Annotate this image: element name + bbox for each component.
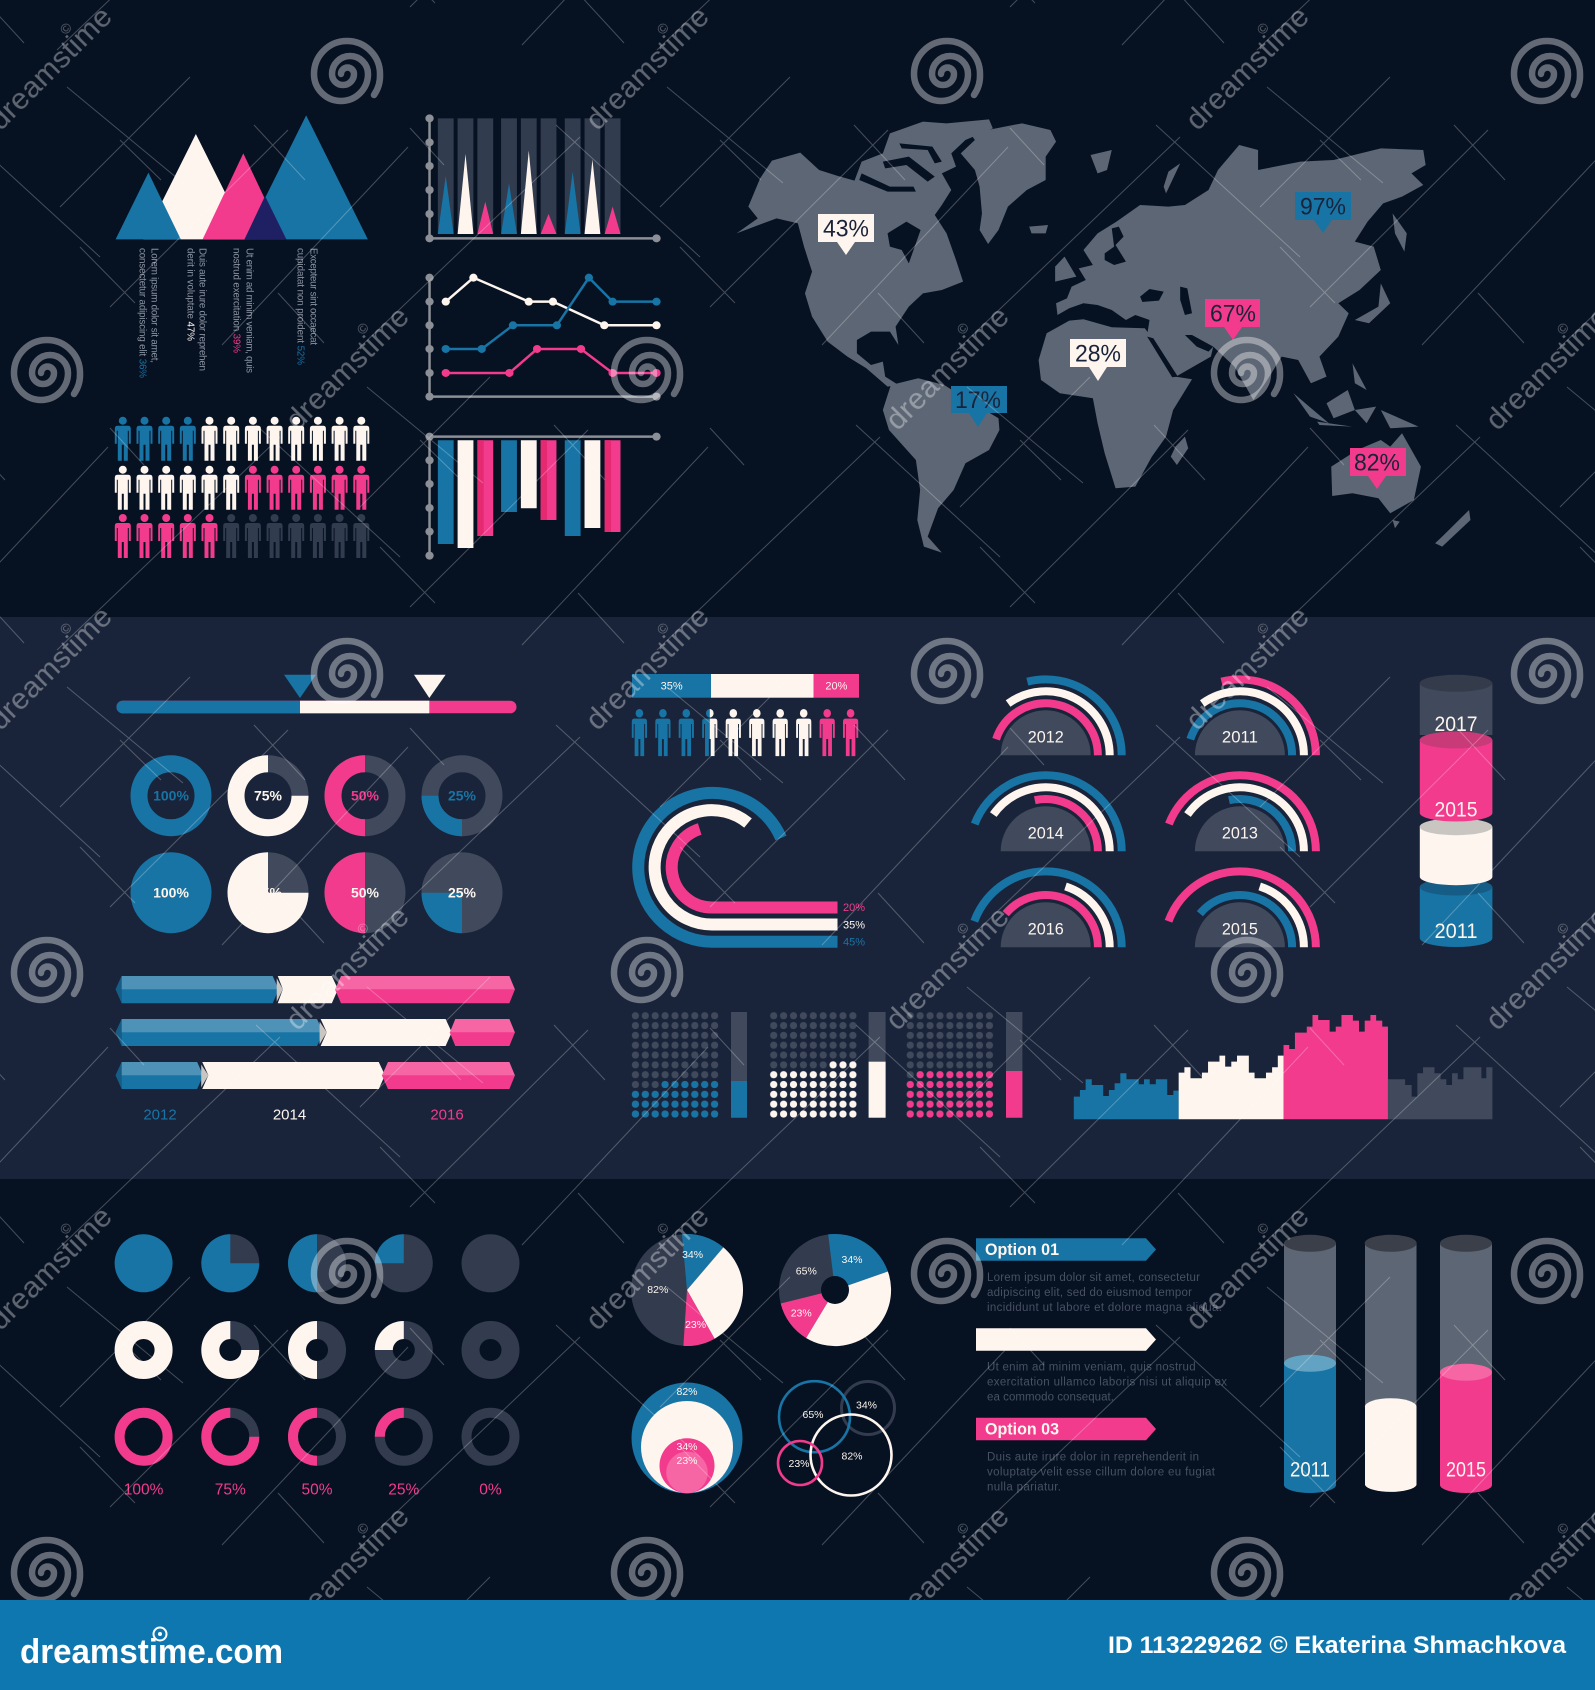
stacked percentage bar: 20% bbox=[825, 680, 848, 692]
watermark: dreamstime text: dreamstime bbox=[279, 300, 416, 437]
stacked cylinder: 2015 bbox=[1434, 799, 1478, 822]
progress pies row bbox=[130, 852, 502, 933]
3D bar year labels: 2016 bbox=[430, 1106, 464, 1124]
watermark: dreamstime text: © bbox=[1553, 319, 1572, 338]
watermark: dreamstime text: © bbox=[953, 919, 972, 938]
watermark: dreamstime text: dreamstime bbox=[1179, 600, 1316, 737]
percentage labels: 0% bbox=[479, 1482, 502, 1498]
vertical captions under mountains: Ut enim ad minim veniam, quis bbox=[244, 248, 254, 373]
stacked percentage bar bbox=[632, 674, 859, 698]
gauge: 2016: 2016 bbox=[1028, 919, 1064, 938]
dot grid gauge: blue bbox=[630, 1011, 747, 1119]
watermark: dreamstime text: © bbox=[353, 319, 372, 338]
watermark: dreamstime text: © bbox=[56, 1219, 75, 1238]
watermark: dreamstime text: © bbox=[1553, 919, 1572, 938]
watermark: dreamstime text: © bbox=[353, 1519, 372, 1538]
stacked cylinder: 2011 bbox=[1434, 920, 1478, 943]
nested circles bbox=[632, 1382, 742, 1494]
3D segmented bars bbox=[116, 976, 515, 1089]
watermark: dreamstime text: © bbox=[353, 919, 372, 938]
progress donuts row: 50% bbox=[351, 788, 380, 804]
option 01 bbox=[976, 1238, 1222, 1314]
tube gauge: 2013: 2013 bbox=[1371, 1459, 1411, 1482]
gauge: 2013 bbox=[1169, 775, 1316, 851]
gauge: 2012: 2012 bbox=[1028, 727, 1064, 746]
progress donuts row bbox=[139, 764, 494, 828]
map pin: 28%: 28% bbox=[1075, 340, 1121, 368]
watermark: dreamstime text: dreamstime bbox=[1179, 1200, 1316, 1337]
pie chart 2 with hole bbox=[779, 1234, 891, 1346]
dot grid gauge: pink bbox=[905, 1011, 1022, 1119]
watermark: dreamstime text: dreamstime bbox=[879, 300, 1016, 437]
hanging bar chart bbox=[425, 433, 661, 560]
line chart bbox=[425, 274, 661, 401]
watermark: dreamstime text: © bbox=[953, 319, 972, 338]
option 01: Option 01 bbox=[985, 1240, 1059, 1259]
panel: bottom background bbox=[0, 1179, 1595, 1600]
3D bar year labels: 2012 bbox=[143, 1106, 177, 1124]
option 02: exercitation ullamco laboris nisi ut aliquip ex bbox=[987, 1376, 1227, 1388]
watermark: dreamstime text: dreamstime bbox=[279, 900, 416, 1037]
people row under stacked bar bbox=[632, 709, 858, 756]
watermark: dreamstime text: © bbox=[953, 1519, 972, 1538]
option 03: Duis aute irure dolor in reprehenderit in bbox=[987, 1452, 1199, 1464]
progress donuts row: 25% bbox=[448, 788, 477, 804]
pie chart 2 with hole: 82% bbox=[841, 1312, 863, 1324]
watermark: dreamstime text: dreamstime bbox=[579, 1200, 716, 1337]
watermark: dreamstime text: dreamstime bbox=[579, 0, 716, 137]
overlapping outline circles: 82% bbox=[841, 1451, 863, 1463]
watermark: dreamstime text: © bbox=[56, 619, 75, 638]
percentage labels: 50% bbox=[301, 1482, 333, 1498]
option 03: voluptate velit esse cillum dolore eu fugiat bbox=[987, 1466, 1216, 1478]
tube gauge: 2013 bbox=[1365, 1235, 1417, 1492]
map pin: 82%: 82% bbox=[1354, 450, 1400, 476]
map pin: 17%: 17% bbox=[955, 387, 1001, 414]
panel: top background bbox=[0, 0, 1595, 617]
dot grid gauge: white bbox=[769, 1011, 886, 1119]
option 01: incididunt ut labore et dolore magna aliqua. bbox=[987, 1302, 1222, 1314]
watermark: dreamstime text: © bbox=[653, 19, 672, 38]
nested circles: 23% bbox=[676, 1455, 698, 1467]
progress donuts row: 75% bbox=[254, 788, 283, 804]
stacked cylinder: 2017 bbox=[1434, 713, 1478, 736]
gauge: 2015: 2015 bbox=[1222, 919, 1258, 938]
nested circles: 82% bbox=[676, 1386, 698, 1398]
footer bar bbox=[0, 1600, 1595, 1690]
spike bar chart bbox=[425, 114, 661, 242]
vertical captions under mountains: Lorem ipsum dolor sit amet, bbox=[148, 248, 160, 363]
progress pies row: 100% bbox=[153, 885, 189, 901]
option 02: Option 02 bbox=[985, 1330, 1059, 1349]
watermark: dreamstime text: © bbox=[1253, 1219, 1272, 1238]
map pin: 28% bbox=[1070, 339, 1126, 381]
concentric arc bars bbox=[638, 793, 865, 949]
percentage labels: 25% bbox=[388, 1482, 420, 1498]
overlapping outline circles bbox=[778, 1381, 894, 1496]
vertical captions under mountains: Duis aute irure dolor reprehen bbox=[196, 248, 208, 371]
pie chart 1: 23% bbox=[685, 1319, 706, 1331]
option 03: Option 03 bbox=[985, 1420, 1059, 1438]
watermark: dreamstime text: dreamstime bbox=[579, 600, 716, 737]
option 02: ea commodo consequat. bbox=[987, 1392, 1114, 1404]
map pin: 43% bbox=[818, 214, 874, 255]
option 01: Lorem ipsum dolor sit amet, consectetur bbox=[987, 1272, 1200, 1284]
watermark: dreamstime text: © bbox=[653, 619, 672, 638]
watermark: dreamstime text: © bbox=[56, 19, 75, 38]
gauge: 2013: 2013 bbox=[1222, 823, 1258, 842]
progress pies row: 50% bbox=[351, 885, 380, 901]
world map bbox=[737, 119, 1470, 553]
pie chart 2 with hole: 65% bbox=[796, 1266, 817, 1278]
pie chart 1 bbox=[631, 1234, 743, 1346]
pie chart 2 with hole: 34% bbox=[841, 1254, 863, 1266]
tube gauge: 2011 bbox=[1284, 1235, 1336, 1493]
progress donuts row: 100% bbox=[153, 788, 189, 804]
vertical captions under mountains: consectetur adipiscing elit 36% bbox=[136, 248, 148, 378]
stacked cylinder: 2013 bbox=[1434, 859, 1478, 882]
gauge: 2014 bbox=[975, 775, 1122, 851]
gauge: 2011: 2011 bbox=[1222, 727, 1258, 746]
step area chart bbox=[1074, 1015, 1492, 1119]
vertical captions under mountains bbox=[136, 248, 318, 378]
pie chart 1: 34% bbox=[682, 1249, 703, 1261]
gauge: 2016 bbox=[974, 871, 1122, 947]
gauge: 2014: 2014 bbox=[1028, 823, 1064, 842]
stacked cylinder bbox=[1420, 675, 1492, 947]
gauge: 2011 bbox=[1190, 679, 1316, 755]
vertical captions under mountains: Excepteur sint occaecat bbox=[308, 248, 318, 345]
progress pies row: 75% bbox=[254, 885, 283, 901]
overlapping outline circles: 65% bbox=[802, 1409, 824, 1421]
gauge: 2015 bbox=[1168, 871, 1316, 947]
watermark: dreamstime text: © bbox=[1553, 1519, 1572, 1538]
watermark: dreamstime text: © bbox=[1253, 619, 1272, 638]
white donut progress row bbox=[124, 1330, 510, 1370]
nested circles: 34% bbox=[676, 1441, 698, 1453]
option 03: nulla pariatur. bbox=[987, 1482, 1061, 1494]
3D bar year labels bbox=[143, 1106, 464, 1124]
3D bar year labels: 2014 bbox=[273, 1106, 306, 1124]
watermark: dreamstime text: dreamstime bbox=[879, 1500, 1016, 1637]
pie chart 1: 82% bbox=[647, 1284, 668, 1296]
option 02: Ut enim ad minim veniam, quis nostrud bbox=[987, 1362, 1196, 1374]
panel: middle background bbox=[0, 617, 1595, 1179]
watermark: dreamstime text: dreamstime bbox=[879, 900, 1016, 1037]
footer credit: ID 113229262 © Ekaterina Shmachkova bbox=[1108, 1632, 1567, 1659]
tube gauge: 2011: 2011 bbox=[1290, 1459, 1330, 1482]
overlapping outline circles: 34% bbox=[856, 1400, 877, 1412]
map pin: 67%: 67% bbox=[1210, 300, 1256, 328]
vertical captions under mountains: nostrud exercitation 39% bbox=[230, 248, 242, 353]
tube gauge: 2015: 2015 bbox=[1446, 1459, 1486, 1482]
map pin: 17% bbox=[951, 386, 1007, 427]
option 03 bbox=[976, 1418, 1216, 1494]
option 01: adipiscing elit, sed do eiusmod tempor bbox=[987, 1287, 1192, 1299]
pink ring progress row bbox=[120, 1413, 514, 1461]
tube gauge: 2015 bbox=[1440, 1235, 1492, 1493]
stacked percentage bar: 35% bbox=[661, 680, 683, 692]
watermark: dreamstime text: dreamstime bbox=[279, 1500, 416, 1637]
progress pies row: 25% bbox=[448, 885, 477, 901]
percentage labels bbox=[124, 1482, 502, 1498]
map pin: 97%: 97% bbox=[1300, 194, 1346, 220]
mountain chart bbox=[116, 115, 368, 239]
concentric arc bars: 45% bbox=[843, 937, 865, 949]
vertical captions under mountains: derit in voluptate 47% bbox=[184, 248, 196, 341]
concentric arc bars: 35% bbox=[843, 920, 865, 932]
concentric arc bars: 20% bbox=[843, 902, 865, 914]
map pin: 43%: 43% bbox=[823, 216, 869, 242]
gauge: 2012 bbox=[996, 679, 1122, 755]
watermark: dreamstime text: © bbox=[1253, 19, 1272, 38]
watermark: dreamstime text: dreamstime bbox=[1179, 0, 1316, 137]
footer logo: dreamstime.com bbox=[20, 1633, 283, 1671]
pie chart 2 with hole: 23% bbox=[791, 1307, 812, 1319]
map pin: 67% bbox=[1205, 299, 1260, 340]
option 02 bbox=[976, 1328, 1227, 1404]
blue pie progress row bbox=[115, 1234, 520, 1292]
percentage labels: 100% bbox=[124, 1482, 164, 1498]
map pin: 82% bbox=[1350, 448, 1406, 489]
pictogram people grid bbox=[115, 417, 369, 558]
percentage labels: 75% bbox=[215, 1482, 246, 1498]
map pin: 97% bbox=[1295, 192, 1351, 233]
slider bar with markers bbox=[116, 675, 516, 713]
overlapping outline circles: 23% bbox=[788, 1458, 810, 1470]
watermark: dreamstime text: © bbox=[653, 1219, 672, 1238]
vertical captions under mountains: cupidatat non proident 52% bbox=[294, 248, 306, 365]
